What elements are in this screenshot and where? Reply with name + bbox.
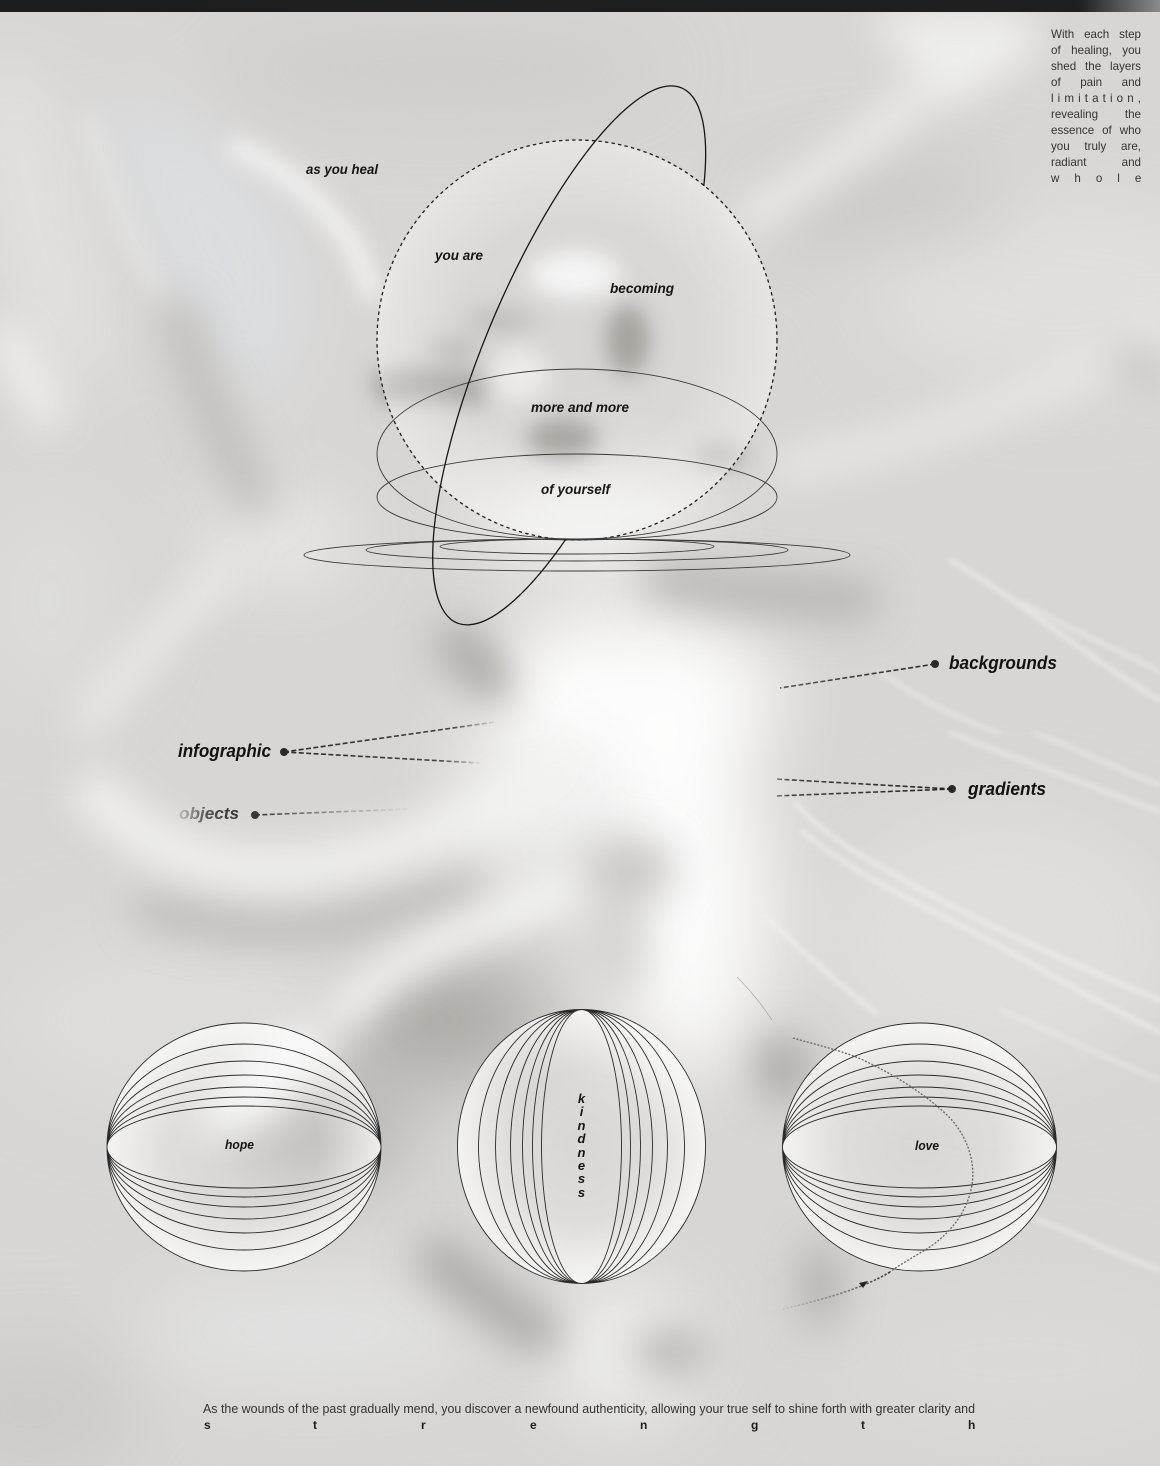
text: kindness: kindness	[578, 1091, 587, 1200]
text block: top-right paragraph: truly	[1084, 140, 1106, 153]
text: love: love	[915, 1138, 939, 1153]
text block: top-right paragraph: essence	[1051, 124, 1094, 137]
text block: top-right paragraph: and	[1122, 76, 1141, 89]
text block: top-right paragraph: who	[1120, 124, 1141, 137]
text block: top-right paragraph: of	[1102, 124, 1112, 137]
text: hope: hope	[225, 1137, 254, 1152]
text block: top-right paragraph: limitation,	[1051, 92, 1145, 105]
text: of yourself: of yourself	[541, 481, 611, 497]
text block: top-right paragraph: each	[1084, 28, 1109, 41]
text block: top-right paragraph: you	[1051, 140, 1070, 153]
text block: top-right paragraph: you	[1122, 44, 1141, 57]
callout: objects: objects	[179, 804, 239, 823]
tilted orbit arc	[433, 86, 706, 625]
small flat ellipse	[440, 539, 714, 554]
text block: top-right paragraph: of	[1051, 44, 1061, 57]
callout: objects	[179, 804, 410, 823]
text: you are: you are	[434, 247, 483, 263]
callout: backgrounds: backgrounds	[949, 653, 1057, 673]
text block: top-right paragraph: the	[1085, 60, 1101, 73]
callout: gradients: gradients	[967, 779, 1046, 799]
text block: top-right paragraph: and	[1122, 156, 1141, 169]
text block: top-right paragraph: With	[1051, 28, 1074, 41]
text: as you heal: as you heal	[306, 161, 379, 177]
text block: top-right paragraph: step	[1119, 28, 1141, 41]
text: bottom sentence: As the wounds of the past gradually mend, you discover a newfound authenticity, allowing your true self to shine forth with greater clarity and	[203, 1401, 975, 1416]
arrow: dotted curve with arrowhead crossing love sphere	[737, 977, 973, 1310]
text block: top-right paragraph: radiant	[1051, 156, 1086, 169]
sphere: love	[782, 1023, 1056, 1271]
text block: top-right paragraph: are,	[1121, 140, 1141, 153]
text block: top-right paragraph: of	[1051, 76, 1061, 89]
text: spaced word strength: strength	[204, 1418, 975, 1432]
middle ellipse	[377, 454, 777, 540]
text: becoming: becoming	[610, 280, 674, 296]
dashed circle	[377, 140, 777, 540]
medium flat ellipse	[366, 539, 788, 561]
callout: infographic: infographic	[178, 741, 271, 761]
callout: backgrounds	[780, 653, 1057, 688]
large upper ellipse	[377, 369, 777, 539]
text block: top-right paragraph: the	[1125, 108, 1141, 121]
text block: top-right paragraph	[1051, 28, 1156, 185]
callout: infographic	[178, 722, 495, 763]
text: more and more: more and more	[531, 399, 629, 415]
sphere: hope	[107, 1023, 381, 1271]
text block: top-right paragraph: pain	[1080, 76, 1102, 89]
callout: gradients	[775, 779, 1046, 799]
text block: top-right paragraph: revealing	[1051, 108, 1098, 121]
text block: top-right paragraph: shed	[1051, 60, 1076, 73]
text block: top-right paragraph: healing,	[1071, 44, 1112, 57]
text block: top-right paragraph: whole	[1051, 172, 1156, 185]
text block: top-right paragraph: layers	[1110, 60, 1141, 73]
wide flat ellipse	[304, 539, 850, 571]
sphere: kindness	[458, 1010, 706, 1284]
